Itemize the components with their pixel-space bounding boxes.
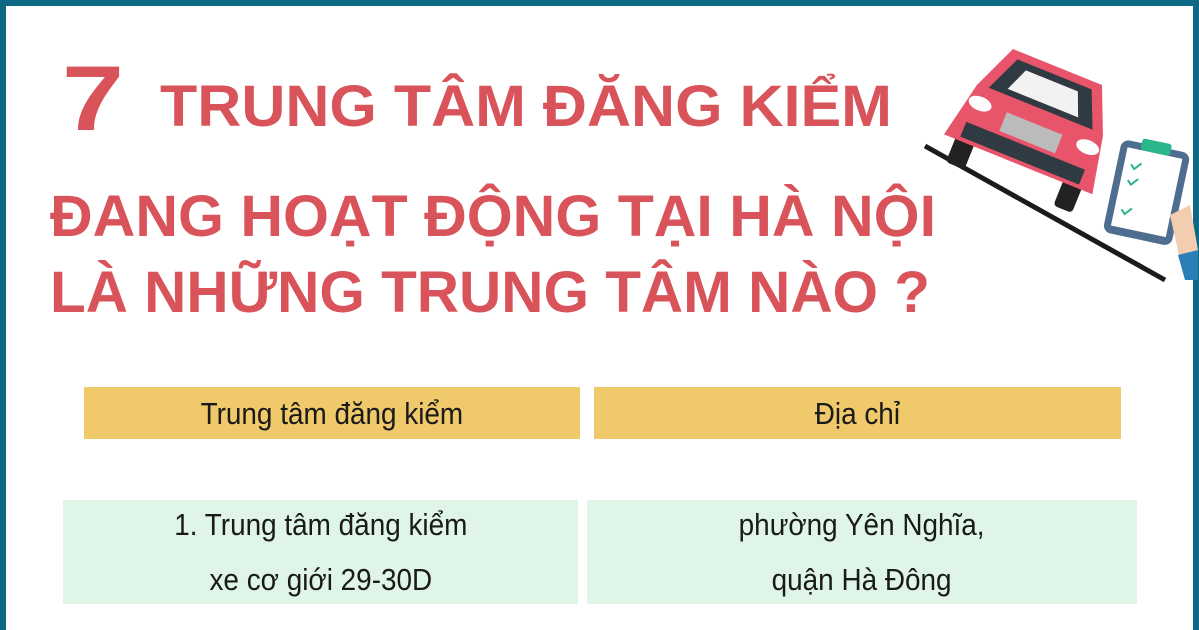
row 1: address (587, 500, 1137, 604)
title: 7 (62, 48, 124, 150)
row 1: address: quận Hà Đông (772, 562, 952, 597)
row 1: center name (63, 500, 578, 604)
header: Địa chỉ: Địa chỉ (815, 396, 900, 430)
header: Trung tâm đăng kiểm: Trung tâm đăng kiểm (201, 396, 463, 430)
header: Trung tâm đăng kiểm (84, 387, 580, 439)
title: LÀ NHỮNG TRUNG TÂM NÀO ? (50, 260, 930, 325)
header: Địa chỉ (594, 387, 1121, 439)
title (50, 48, 936, 325)
row 1: center name: 1. Trung tâm đăng kiểm (174, 507, 467, 542)
title: TRUNG TÂM ĐĂNG KIỂM (160, 74, 892, 139)
title: ĐANG HOẠT ĐỘNG TẠI HÀ NỘI (50, 184, 936, 249)
icon: car on ramp with clipboard (924, 49, 1198, 282)
row 1: address: phường Yên Nghĩa, (739, 507, 985, 542)
row 1: center name: xe cơ giới 29-30D (209, 562, 432, 597)
